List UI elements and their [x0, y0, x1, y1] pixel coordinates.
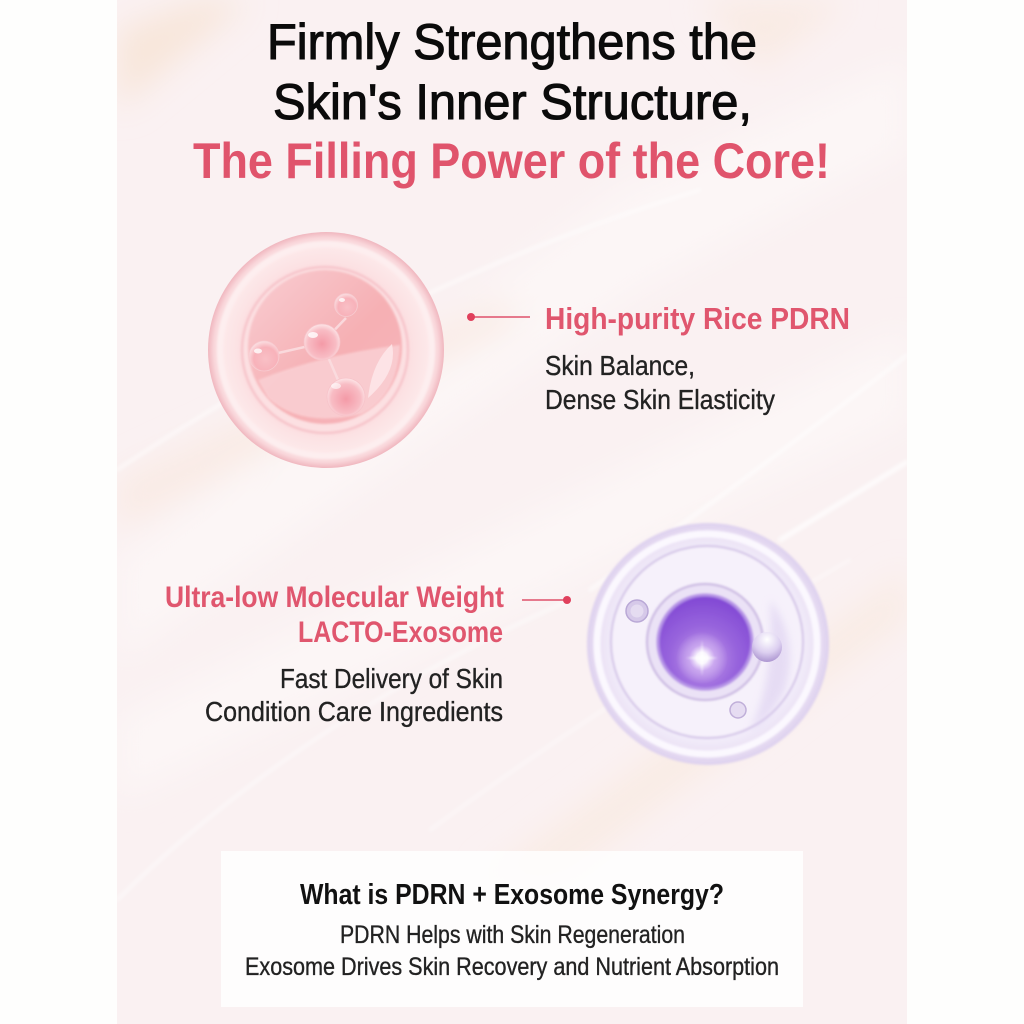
- title: The Filling Power of the Core!: [193, 133, 830, 189]
- callout description: [205, 663, 503, 727]
- box heading: What is PDRN + Exosome Synergy?: [300, 879, 724, 911]
- icon: purple exosome dish: [587, 523, 829, 765]
- box text: [245, 921, 779, 981]
- callout description: [545, 350, 775, 415]
- callout description: Fast Delivery of Skin: [280, 663, 503, 694]
- callout description: Condition Care Ingredients: [205, 696, 503, 727]
- title: Firmly Strengthens the: [267, 14, 757, 70]
- title: Skin's Inner Structure,: [273, 74, 752, 130]
- title: [193, 14, 830, 189]
- callout heading: High-purity Rice PDRN: [545, 301, 850, 336]
- callout description: Dense Skin Elasticity: [545, 384, 775, 415]
- callout heading: Ultra-low Molecular Weight: [165, 581, 504, 614]
- box text: Exosome Drives Skin Recovery and Nutrient Absorption: [245, 953, 779, 981]
- panel: silky cream texture background: [117, 0, 907, 1024]
- callout heading: LACTO-Exosome: [298, 616, 503, 649]
- callout: high-purity rice PDRN: [467, 301, 850, 415]
- molecule spheres: [249, 294, 365, 416]
- callout heading: [165, 581, 504, 649]
- callout: LACTO-exosome: [165, 581, 571, 727]
- exosome bubbles: [626, 600, 782, 718]
- connector line with dot: [522, 596, 571, 604]
- callout description: Skin Balance,: [545, 350, 695, 381]
- icon: pink PDRN molecule dish: [208, 232, 444, 468]
- connector line with dot: [467, 313, 530, 321]
- box text: PDRN Helps with Skin Regeneration: [340, 921, 685, 949]
- molecule bonds: [265, 318, 346, 396]
- panel: synergy explanation box: [221, 851, 803, 1007]
